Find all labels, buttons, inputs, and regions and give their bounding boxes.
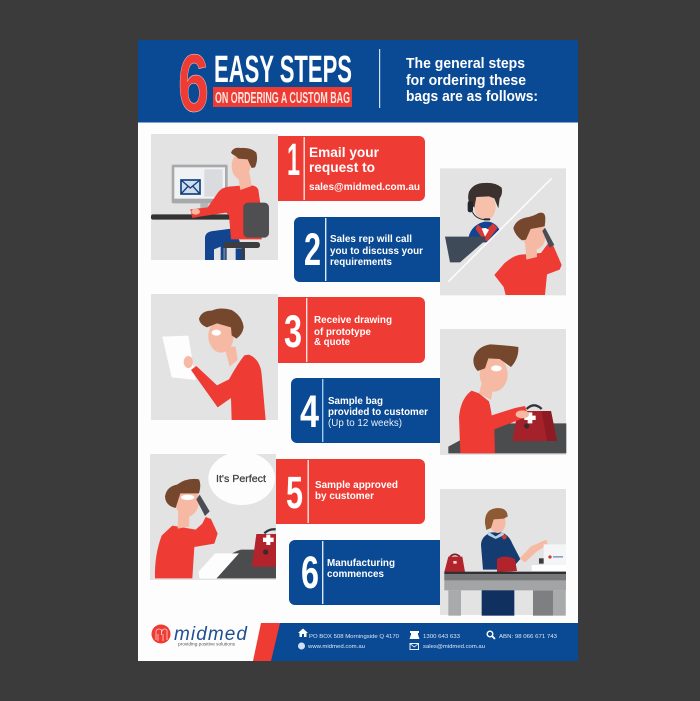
- step 4 card: provided to customer: [328, 406, 428, 418]
- step 3 card: Receive drawing: [314, 314, 392, 326]
- step 6 card: 6: [301, 547, 319, 598]
- diagonal divider: [448, 178, 552, 282]
- logo: midmed: providing positive solutions: [178, 642, 236, 646]
- bag in hands: [497, 557, 517, 572]
- step 1 card: request to: [309, 159, 375, 175]
- contact: phone: 1300 643 633: [423, 634, 460, 640]
- worker: [481, 508, 548, 616]
- contact: website: www.midmed.com.au: [307, 644, 365, 650]
- illustration panel: inspecting sample bag: [440, 329, 566, 455]
- step 3 card: [278, 297, 425, 363]
- big number 6: 6: [178, 38, 209, 129]
- step 5 card: Sample approved: [315, 479, 398, 491]
- conveyor legs: [448, 590, 566, 616]
- person at desk: [190, 148, 262, 260]
- subtitle label: ON ORDERING A CUSTOM BAG: [215, 90, 350, 107]
- contact: address: PO BOX 508 Morningside Q 4170: [309, 634, 399, 640]
- intro text: The general steps: [406, 55, 525, 72]
- step 5 card: by customer: [315, 490, 374, 502]
- step 2 card: 2: [304, 224, 321, 275]
- sample bag: [512, 405, 557, 441]
- speech bubble: It's Perfect: [216, 474, 266, 485]
- contact: email: sales@midmed.com.au: [423, 644, 485, 650]
- step 6 card: Manufacturing: [327, 557, 395, 569]
- title: easy steps: EASY STEPS: [214, 49, 352, 91]
- step 6 card: commences: [327, 568, 384, 580]
- footer red slash: [253, 623, 281, 661]
- logo: midmed: midmed: [174, 624, 248, 645]
- contact: ABN: [487, 631, 557, 640]
- man on phone: [155, 479, 218, 578]
- step 3 card: & quote: [314, 336, 350, 348]
- paperwork: [198, 553, 239, 579]
- footer blue band: [271, 623, 578, 661]
- step 4 card: 4: [300, 386, 319, 437]
- header banner: [138, 38, 578, 129]
- paper: [162, 336, 196, 380]
- step 2 card: [294, 217, 440, 282]
- step 5 card: 5: [286, 467, 303, 518]
- poster sheet: [138, 40, 578, 661]
- sample bag: [252, 529, 276, 567]
- step 2 card: you to discuss your: [330, 245, 423, 257]
- illustration panel: emailing at a computer: [151, 134, 278, 260]
- conveyor belt: [444, 572, 566, 590]
- customer service rep with headset: [468, 183, 502, 242]
- step 4 card: Sample bag: [328, 395, 383, 407]
- step 1 card: Email your: [309, 144, 380, 160]
- subtitle label: [213, 87, 352, 107]
- illustration panel: customer approves sample: [150, 452, 276, 580]
- step 1 card: [278, 134, 425, 201]
- icon: monitor with envelope: [172, 165, 228, 212]
- customer on phone: [494, 213, 562, 295]
- office chair: [223, 203, 269, 260]
- step 3 card: of prototype: [314, 326, 371, 338]
- intro text: for ordering these: [406, 72, 526, 89]
- step 4 card: [291, 378, 440, 443]
- illustration panel: manufacturing: [440, 489, 566, 616]
- intro text: [406, 55, 538, 105]
- illustration panel: sales rep calling customer: [440, 168, 566, 295]
- step 2 card: requirements: [330, 256, 392, 268]
- table: [448, 423, 566, 453]
- desk: [151, 214, 234, 220]
- intro text: bags are as follows:: [406, 88, 538, 105]
- step 1 card: 1: [287, 134, 300, 185]
- table: [216, 550, 276, 578]
- step 2 card: Sales rep will call: [330, 233, 412, 245]
- man with bag: [459, 344, 529, 453]
- illustration panel: reading drawing and quote: [151, 294, 278, 420]
- footer: [152, 623, 578, 661]
- laptop: [445, 237, 486, 262]
- contact: phone: [410, 631, 460, 640]
- step 3 card: 3: [284, 306, 302, 357]
- step 6 card: [289, 540, 440, 605]
- contact: website: [298, 642, 365, 650]
- step 5 card: [276, 459, 425, 524]
- step 4 card: (Up to 12 weeks): [328, 417, 402, 429]
- contact: address: [298, 628, 399, 640]
- man reading: [184, 308, 266, 420]
- bag on conveyor: [444, 554, 465, 572]
- step 1 card: sales@midmed.com.au: [309, 182, 420, 193]
- contact: ABN: ABN: 98 066 671 743: [499, 634, 557, 640]
- boxed documents: [532, 544, 566, 571]
